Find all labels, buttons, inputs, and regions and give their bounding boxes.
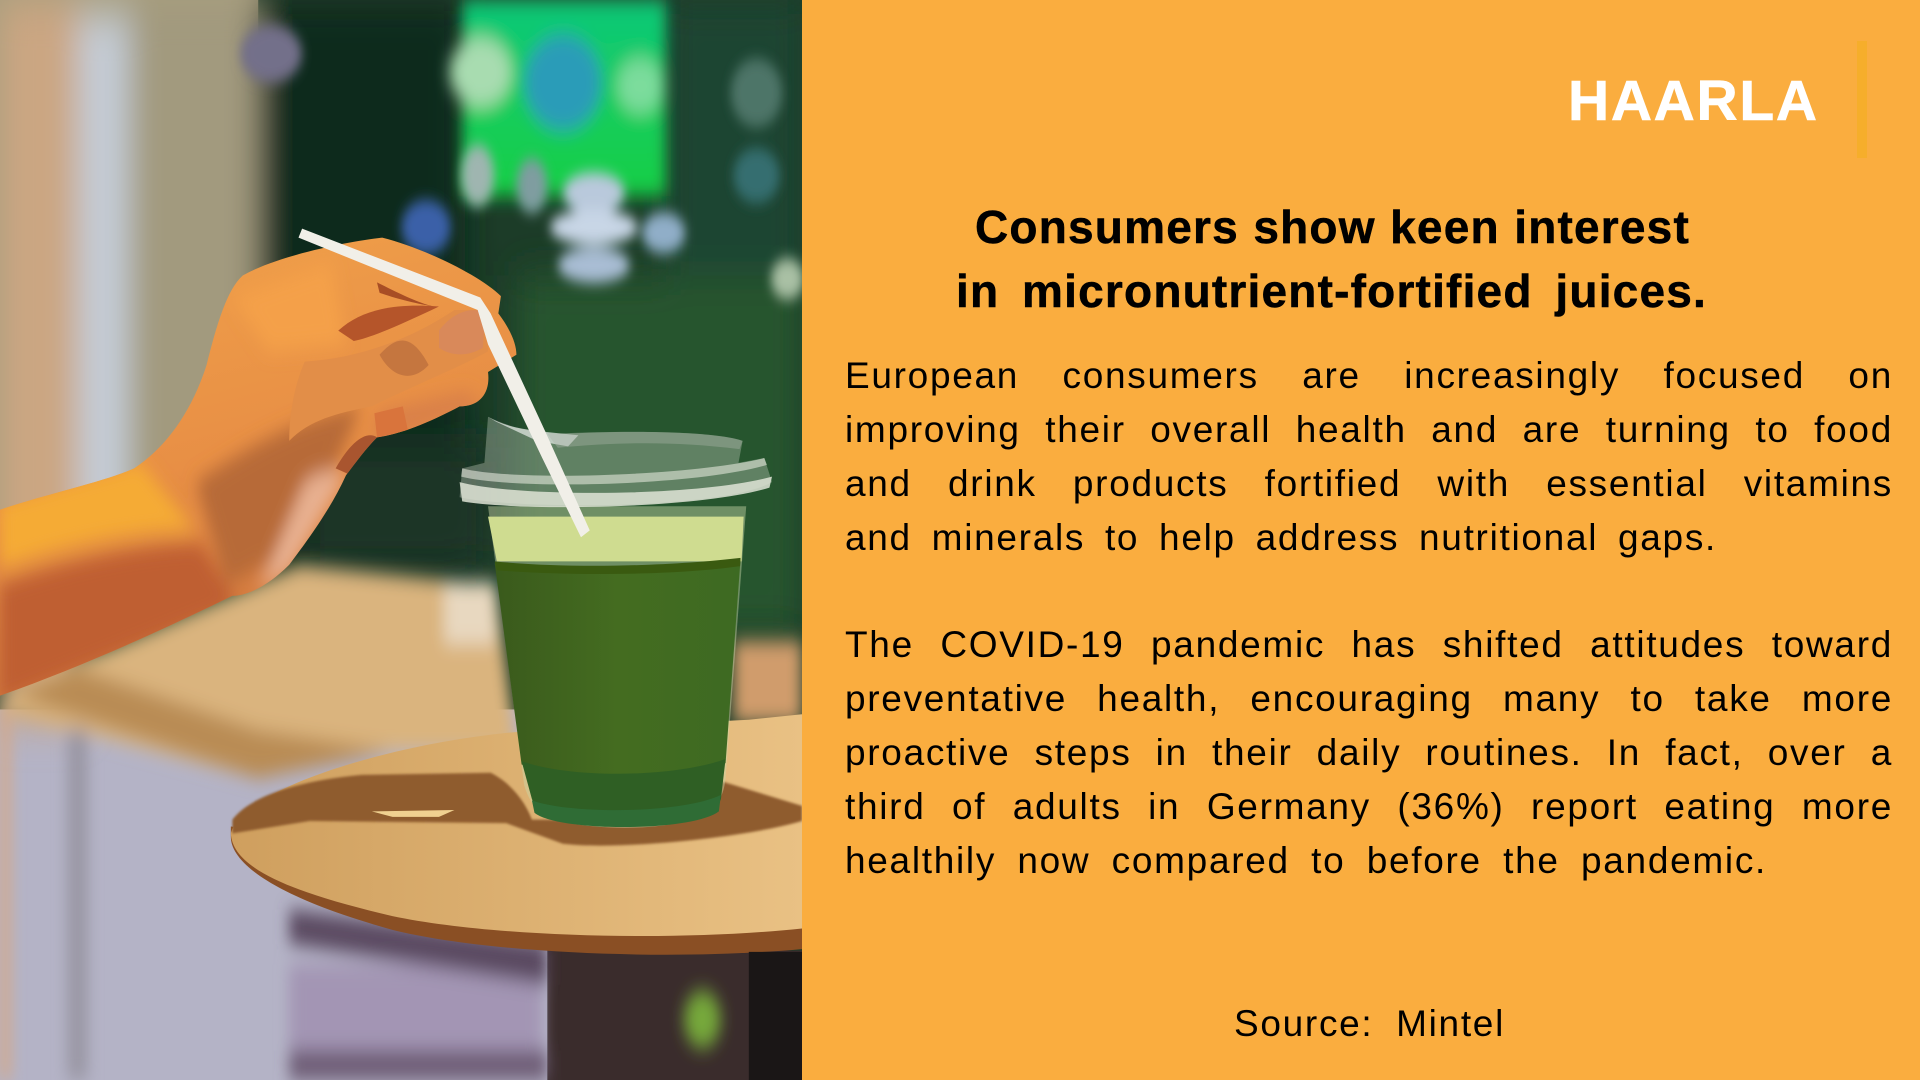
paragraph 1: and drink products fortified with essential vitamins (845, 463, 1893, 504)
paragraph 2: healthily now compared to before the pandemic. (845, 840, 1767, 881)
paragraph 2: preventative health, encouraging many to take more (845, 678, 1893, 719)
straw (298, 229, 590, 537)
photo: hand holding straw in green juice cup (0, 0, 802, 1080)
paragraph 1: European consumers are increasingly focused on (845, 355, 1893, 396)
bokeh lights (240, 25, 804, 300)
heading: in micronutrient-fortified juices. (956, 265, 1707, 317)
cup (460, 417, 772, 828)
juice (495, 559, 741, 775)
blurred bright green window (449, 0, 666, 196)
paragraph 1 (845, 355, 1893, 558)
arm and hand (0, 238, 516, 703)
paragraph 1: and minerals to help address nutritional gaps. (845, 517, 1717, 558)
paragraph 2: proactive steps in their daily routines. In fact, over a (845, 732, 1893, 773)
source: Source: Mintel (1234, 1003, 1505, 1044)
paragraph 2: The COVID-19 pandemic has shifted attitudes toward (845, 624, 1893, 665)
paragraph 1: improving their overall health and are turning to food (845, 409, 1893, 450)
table (231, 714, 802, 1080)
heading (956, 201, 1707, 317)
paragraph 2 (845, 624, 1893, 881)
heading: Consumers show keen interest (975, 201, 1690, 253)
lid (460, 417, 772, 505)
paragraph 2: third of adults in Germany (36%) report eating more (845, 786, 1893, 827)
blurred wooden counter and floor (0, 565, 802, 1080)
accent bar (1857, 41, 1867, 158)
blurred background (0, 0, 804, 1080)
